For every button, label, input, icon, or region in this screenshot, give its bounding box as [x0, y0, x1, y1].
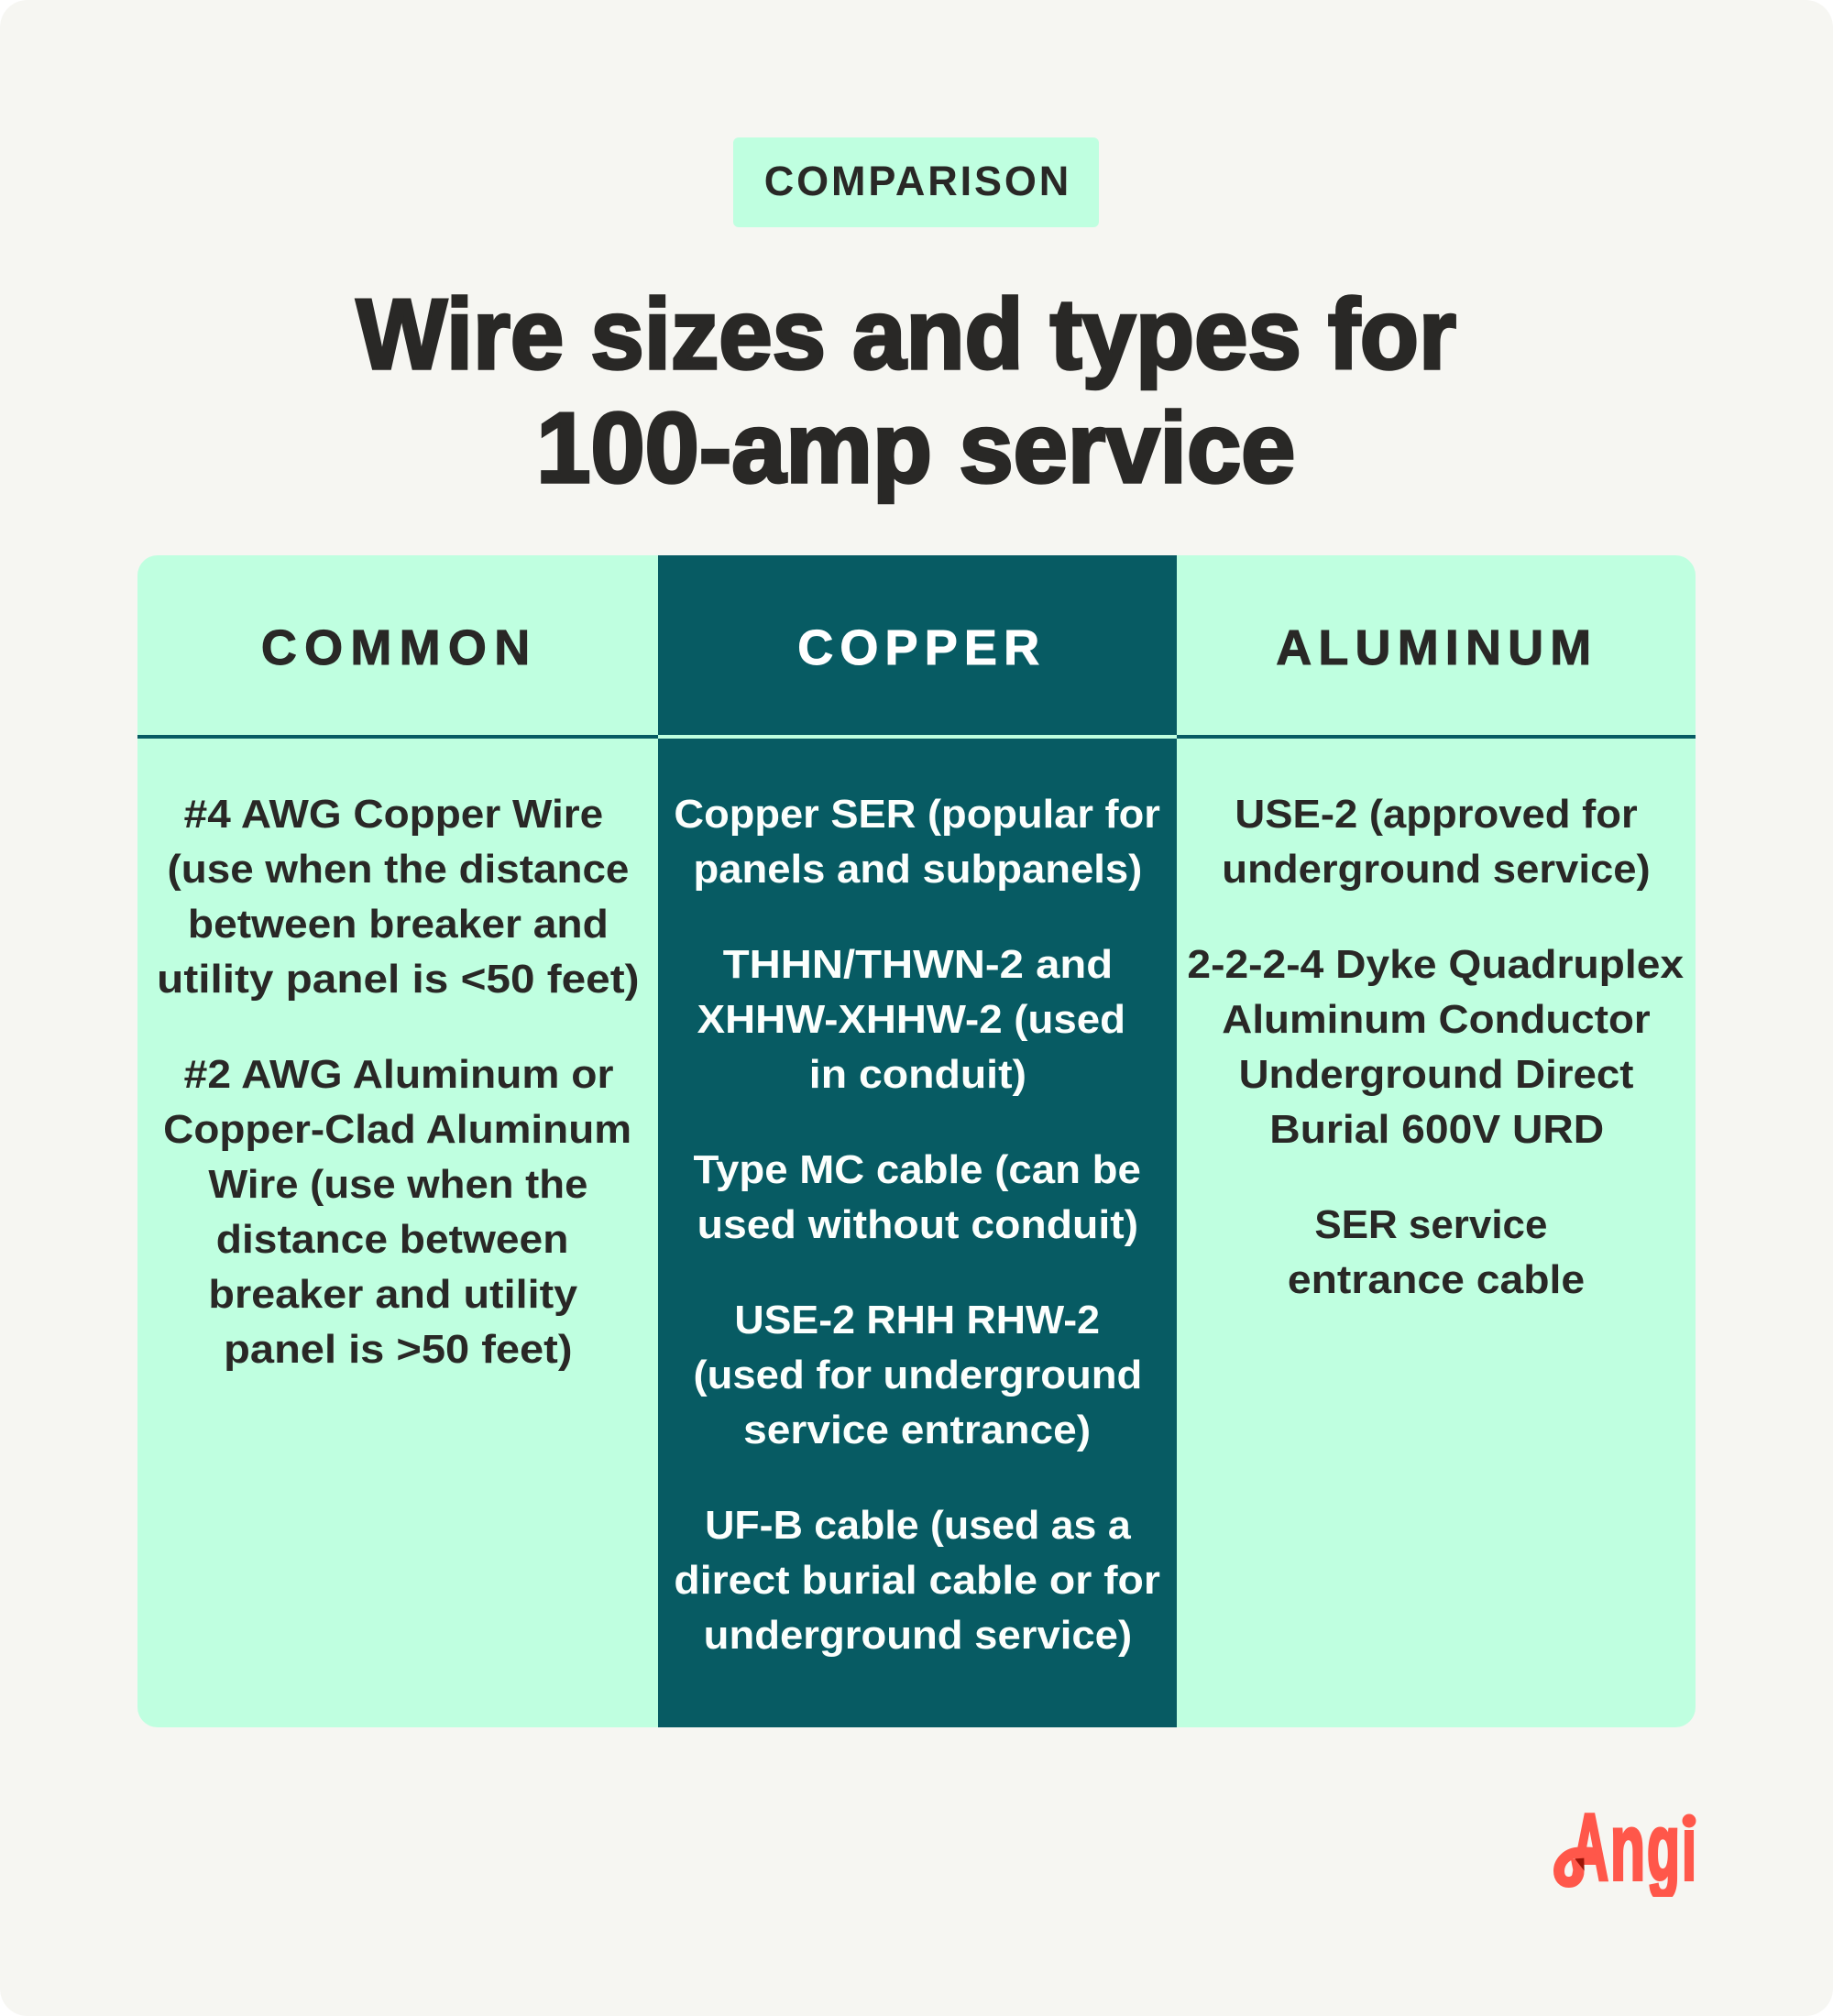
copper: USE-2 text: service entrance)	[743, 1408, 1091, 1452]
common: #4 AWG text: (use when the distance	[167, 847, 629, 892]
common: #4 AWG text: #4 AWG Copper Wire	[184, 792, 603, 837]
header rule	[137, 735, 1696, 739]
copper: SER text: panels and subpanels)	[693, 847, 1142, 892]
aluminum: SER text: SER service	[1314, 1202, 1547, 1247]
copper: UF-B text: UF-B cable (used as a	[705, 1503, 1131, 1548]
common: #2 AWG text: distance between	[216, 1217, 568, 1262]
comparison table	[137, 555, 1696, 1727]
common: #2 AWG text: Copper-Clad Aluminum	[163, 1107, 631, 1152]
aluminum: Quadruplex text: Burial 600V URD	[1269, 1107, 1604, 1152]
heading: common: COMMON	[261, 620, 530, 675]
logo: Angi: g	[1647, 1794, 1680, 1900]
logo: Angi	[1553, 1813, 1696, 1897]
common: #2 AWG text: panel is >50 feet)	[224, 1327, 572, 1372]
copper: SER text	[674, 792, 1160, 892]
badge: comparison: COMPARISON	[764, 158, 1069, 204]
title: 100-amp service	[536, 392, 1295, 504]
logo: Angi: n	[1610, 1794, 1645, 1900]
copper: USE-2 text: USE-2 RHH RHW-2	[734, 1298, 1100, 1342]
logo: Angi: A	[1571, 1794, 1608, 1900]
badge: comparison	[733, 137, 1099, 227]
common: #4 AWG text: utility panel is <50 feet)	[157, 957, 639, 1002]
logo: Angi: i	[1682, 1794, 1696, 1900]
aluminum: Quadruplex text: Underground Direct	[1239, 1052, 1634, 1097]
aluminum: USE-2 text: USE-2 (approved for	[1235, 792, 1638, 837]
aluminum: Quadruplex text	[1187, 942, 1685, 1152]
title	[357, 279, 1456, 504]
copper: UF-B text: direct burial cable or for	[674, 1558, 1160, 1603]
common: #2 AWG text	[163, 1052, 631, 1372]
common: #2 AWG text: breaker and utility	[208, 1272, 578, 1317]
table background	[137, 555, 1696, 1727]
copper: MC cable text: used without conduit)	[697, 1202, 1138, 1247]
common: #4 AWG text: between breaker and	[188, 902, 609, 947]
aluminum: Quadruplex text: 2-2-2-4 Dyke Quadruplex	[1187, 942, 1685, 987]
copper: USE-2 text: (used for underground	[693, 1353, 1142, 1397]
copper: MC cable text	[693, 1147, 1141, 1247]
copper: THHN text: THHN/THWN-2 and	[723, 942, 1113, 987]
copper: THHN text: XHHW-XHHW-2 (used	[697, 997, 1125, 1042]
aluminum: Quadruplex text: Aluminum Conductor	[1222, 997, 1651, 1042]
copper: USE-2 text	[693, 1298, 1142, 1452]
panel: copper column	[658, 555, 1177, 1727]
copper: THHN text: in conduit)	[809, 1052, 1026, 1097]
heading: copper: COPPER	[797, 620, 1039, 675]
copper: THHN text	[697, 942, 1125, 1097]
aluminum: SER text	[1288, 1202, 1585, 1302]
common: #2 AWG text: #2 AWG Aluminum or	[184, 1052, 613, 1097]
copper: UF-B text	[674, 1503, 1160, 1658]
copper: MC cable text: Type MC cable (can be	[693, 1147, 1141, 1192]
aluminum: USE-2 text: underground service)	[1222, 847, 1651, 892]
common: #2 AWG text: Wire (use when the	[208, 1162, 587, 1207]
aluminum: SER text: entrance cable	[1288, 1257, 1585, 1302]
aluminum: USE-2 text	[1222, 792, 1651, 892]
title: Wire sizes and types for	[357, 279, 1456, 390]
copper: SER text: Copper SER (popular for	[674, 792, 1160, 837]
heading: aluminum: ALUMINUM	[1276, 620, 1591, 675]
common: #4 AWG text	[157, 792, 639, 1002]
copper: UF-B text: underground service)	[704, 1613, 1132, 1658]
